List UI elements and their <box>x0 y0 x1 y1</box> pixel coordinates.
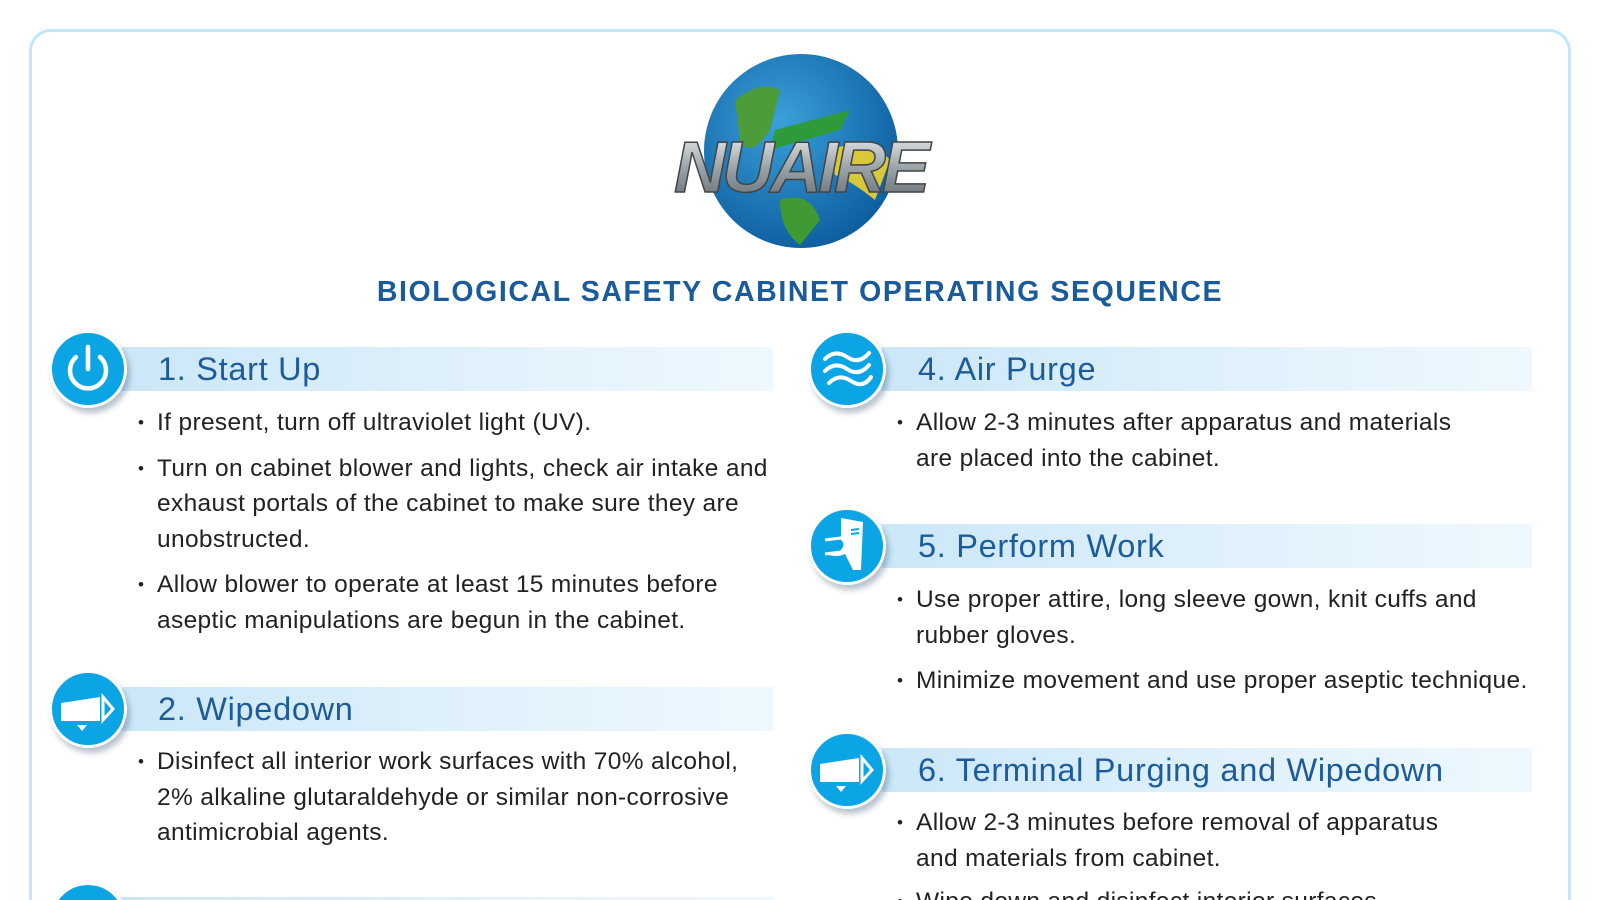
section 4 header band: 4. Air Purge <box>918 351 1096 387</box>
section 6 header band: 6. Terminal Purging and Wipedown <box>918 752 1444 788</box>
section 6 header band <box>882 748 1532 792</box>
section 2 header band: 2. Wipedown <box>158 691 354 727</box>
section 4 text: Allow 2-3 minutes after apparatus and materials <box>916 409 1451 436</box>
section 4 text <box>898 409 1451 472</box>
section 1 header band: 1. Start Up <box>158 351 321 387</box>
section 5 header band <box>882 524 1532 568</box>
section 1 text: If present, turn off ultraviolet light (UV). <box>157 409 591 436</box>
section 1 header band <box>122 347 773 391</box>
section 5 text: Minimize movement and use proper aseptic technique. <box>916 667 1528 694</box>
logo: globe <box>674 54 933 248</box>
section 1 text: Allow blower to operate at least 15 minutes before <box>157 571 718 598</box>
icon: air waves <box>808 330 886 408</box>
icon: wipe <box>49 670 127 748</box>
section 5 text: rubber gloves. <box>916 622 1076 648</box>
logo: globe: NUAIRE <box>674 128 932 208</box>
section 1 text: exhaust portals of the cabinet to make sure they are <box>157 490 739 517</box>
section 1 text: Turn on cabinet blower and lights, check air intake and <box>157 454 768 482</box>
section 4 text: are placed into the cabinet. <box>916 444 1220 472</box>
section 3 header band (partial) <box>122 897 773 900</box>
section 5 header band: 5. Perform Work <box>918 528 1164 564</box>
section 5 text: Use proper attire, long sleeve gown, knit cuffs and <box>916 586 1477 613</box>
section 6 text: and materials from cabinet. <box>916 844 1221 872</box>
section 2 text <box>138 748 738 846</box>
section 1 text: unobstructed. <box>157 526 310 552</box>
section 2 text: Disinfect all interior work surfaces with 70% alcohol, <box>157 748 738 775</box>
section 2 text: 2% alkaline glutaraldehyde or similar non-corrosive <box>157 784 729 810</box>
title: BIOLOGICAL SAFETY CABINET OPERATING SEQUENCE <box>377 276 1223 308</box>
icon: power <box>49 330 127 408</box>
icon: section 3 (partial) <box>49 882 127 900</box>
section 4 header band <box>882 347 1532 391</box>
section 1 text <box>138 409 768 634</box>
section 2 text: antimicrobial agents. <box>157 819 389 846</box>
icon: wipe <box>808 731 886 809</box>
icon: glove <box>808 507 886 585</box>
section 2 header band <box>122 687 773 731</box>
section 5 text <box>898 586 1528 694</box>
section 1 text: aseptic manipulations are begun in the cabinet. <box>157 606 686 634</box>
section 6 text: Allow 2-3 minutes before removal of apparatus <box>916 809 1438 836</box>
section 6 text <box>898 809 1438 900</box>
